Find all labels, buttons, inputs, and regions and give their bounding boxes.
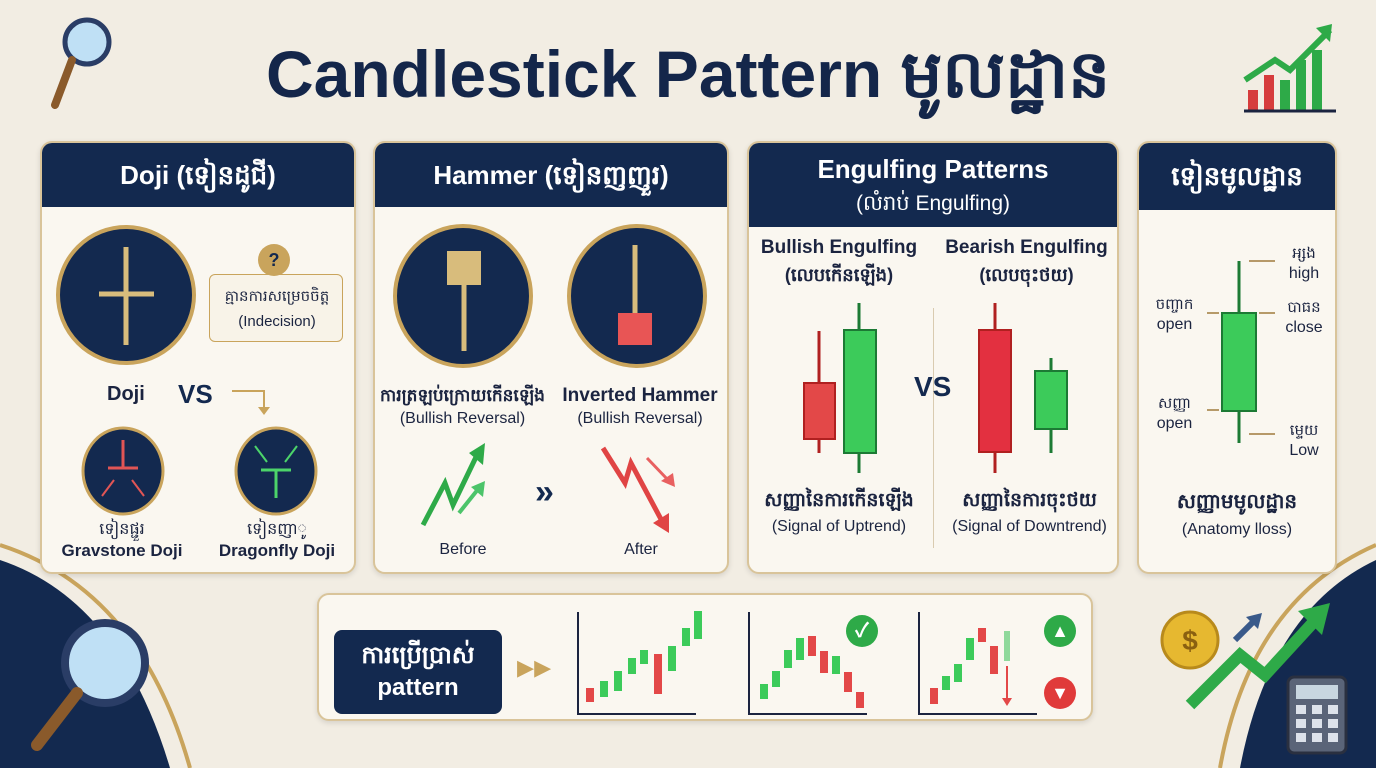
icon: check bbox=[846, 615, 878, 647]
icon: magnifier bottom-left bbox=[31, 619, 149, 751]
panel: Doji: VS bbox=[178, 379, 213, 409]
heading: Engulfing: Engulfing Patterns bbox=[817, 154, 1049, 184]
panel: Hammer: (Bullish Reversal) bbox=[400, 410, 525, 427]
text: Doji VS: Doji bbox=[107, 383, 145, 405]
text: hammer label: ការត្រឡប់ក្រោយកើនឡើង bbox=[380, 386, 545, 405]
label box: pattern usage: ការប្រើប្រាស់ bbox=[361, 642, 475, 669]
heading: anatomy: ទៀនមូលដ្ឋាន bbox=[1171, 161, 1303, 191]
text: bullish engulfing: Bullish Engulfing bbox=[761, 237, 917, 258]
panel: Hammer: (Bullish Reversal) bbox=[577, 410, 703, 427]
panel: Doji: Dragonfly Doji bbox=[219, 541, 335, 560]
label box: pattern usage bbox=[334, 630, 502, 714]
title: Candlestick Pattern មូលដ្ឋាន bbox=[266, 37, 1110, 111]
heading: Hammer: Hammer (ទៀនញញួរ) bbox=[433, 160, 669, 190]
arrow: gold chevrons: ▸▸ bbox=[517, 648, 551, 686]
arrow: chevrons: » bbox=[535, 473, 554, 511]
panel: Anatomy bbox=[1137, 141, 1337, 574]
panel: Anatomy: បាធន bbox=[1287, 299, 1321, 316]
icon: growth chart top-right bbox=[1243, 24, 1336, 112]
heading: anatomy bbox=[1139, 143, 1335, 210]
panel: Engulfing bbox=[747, 141, 1119, 574]
icon: gravestone doji bbox=[82, 426, 164, 516]
icon: coin, arrow, calculator bottom-right bbox=[1160, 603, 1348, 754]
callout: indecision bbox=[209, 274, 343, 342]
heading: Hammer bbox=[375, 143, 727, 207]
panel: usage bbox=[317, 593, 1093, 721]
heading: Engulfing: (លំរាប់ Engulfing) bbox=[856, 192, 1010, 215]
panel: Anatomy: close bbox=[1285, 319, 1323, 336]
panel: Anatomy: open bbox=[1157, 316, 1192, 333]
chart: before arrows bbox=[420, 443, 485, 526]
text: dragonfly label: ទៀនញាូ bbox=[247, 521, 307, 538]
arrow: down bbox=[232, 390, 270, 415]
panel: Anatomy: (Anatomy lloss) bbox=[1182, 521, 1292, 538]
callout: indecision: (Indecision) bbox=[238, 313, 316, 330]
text: VS: VS bbox=[914, 371, 951, 402]
panel: Anatomy: សញ្ញា bbox=[1158, 395, 1191, 412]
chart: after arrows bbox=[600, 446, 675, 533]
icon: doji circle bbox=[56, 225, 196, 365]
panel: Doji: Gravstone Doji bbox=[62, 541, 182, 560]
icon: check: ✓ bbox=[855, 620, 869, 642]
callout: indecision: គ្មានការសម្រេចចិត្ត bbox=[225, 288, 329, 305]
panel: Engulfing: (Signal of Uptrend) bbox=[772, 518, 906, 535]
chart: engulfing candles bbox=[803, 303, 1068, 473]
icon: up bbox=[1044, 615, 1076, 647]
text: uptrend signal: សញ្ញានៃការកើនឡើង bbox=[764, 490, 914, 511]
icon: up: ▲ bbox=[1051, 621, 1069, 641]
icon: question: ? bbox=[268, 250, 280, 270]
label box: pattern usage: pattern bbox=[377, 674, 459, 701]
heading: Engulfing bbox=[749, 143, 1117, 227]
panel: Engulfing: (លេបចុះថយ) bbox=[979, 265, 1074, 285]
icon: magnifier top-left bbox=[51, 18, 112, 109]
panel: Anatomy: ចញ្ចាក bbox=[1156, 296, 1193, 313]
panel: Anatomy: open bbox=[1157, 415, 1192, 432]
panel: Anatomy: ម្ទេយ bbox=[1290, 422, 1318, 439]
icon: down: ▼ bbox=[1051, 683, 1069, 703]
heading: Doji: Doji (ទៀនដូជី) bbox=[120, 160, 276, 190]
chart: candle anatomy bbox=[1207, 260, 1275, 443]
panel: Engulfing: (Signal of Downtrend) bbox=[952, 518, 1107, 535]
text: gravestone label: ទៀនផ្ជួរ bbox=[99, 521, 145, 538]
panel: Anatomy: high bbox=[1289, 265, 1319, 282]
icon: inverted hammer bbox=[567, 224, 707, 368]
text: downtrend signal: សញ្ញានៃការចុះថយ bbox=[962, 490, 1097, 511]
text: anatomy caption: សញ្ញាមមូលដ្ឋាន bbox=[1177, 491, 1297, 513]
text: inverted hammer label: Inverted Hammer bbox=[562, 385, 718, 406]
panel: Hammer: Before bbox=[439, 541, 487, 558]
panel: Engulfing: (លេបកើនឡើង) bbox=[785, 265, 893, 285]
panel: Doji bbox=[40, 141, 356, 574]
panel: Anatomy: Low bbox=[1289, 442, 1319, 459]
panel: Hammer: After bbox=[624, 541, 658, 558]
chart: usage charts bbox=[577, 611, 1037, 715]
panel: Hammer bbox=[373, 141, 729, 574]
text: bearish engulfing: Bearish Engulfing bbox=[945, 237, 1108, 258]
icon: dragonfly doji bbox=[234, 426, 318, 516]
icon: question bbox=[258, 244, 290, 276]
text: anatomy labels: អ្សង bbox=[1292, 245, 1316, 262]
icon: hammer bbox=[393, 224, 533, 368]
heading: Doji bbox=[42, 143, 354, 207]
icon: down bbox=[1044, 677, 1076, 709]
icon: coin, arrow, calculator bottom-right: $ bbox=[1182, 625, 1198, 656]
